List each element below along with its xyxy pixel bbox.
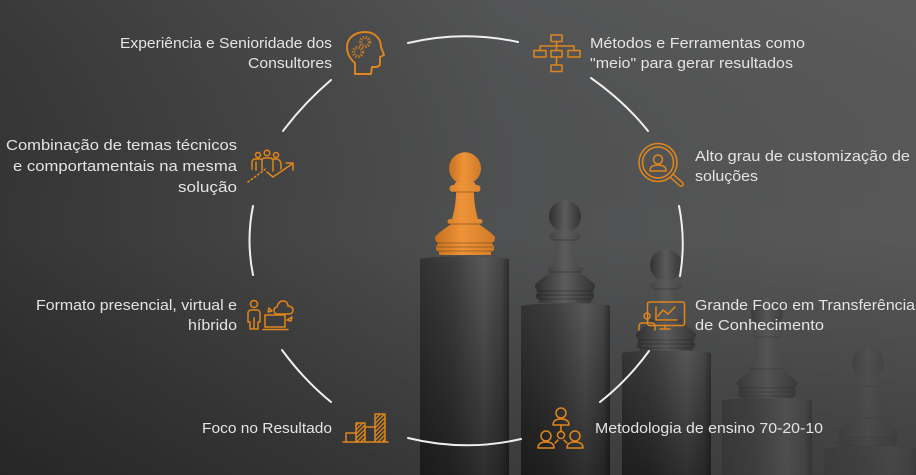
item: combinação — [6, 137, 293, 196]
item: experiência: Experiência e Senioridade dos — [120, 35, 332, 52]
item: customização: Alto grau de customização de — [695, 148, 910, 165]
icon: magnifier with person — [639, 144, 683, 186]
item: resultado — [202, 414, 388, 442]
item: experiência — [120, 32, 384, 74]
item: combinação: Combinação de temas técnicos — [6, 137, 237, 154]
icon: head with gears — [347, 32, 384, 74]
item: combinação: e comportamentais na mesma — [13, 158, 238, 175]
icon: flowchart — [534, 35, 580, 72]
chess podium — [420, 152, 916, 475]
icon: team with growth arrow — [248, 150, 293, 182]
circular ring arcs — [250, 36, 683, 445]
pawn and pedestal 2 — [521, 200, 610, 475]
item: formato — [36, 297, 293, 334]
icon: bar chart — [343, 414, 388, 442]
item: customização: soluções — [695, 168, 758, 185]
item: combinação: solução — [178, 179, 237, 196]
icon: connected people — [538, 408, 583, 448]
item: transferência — [639, 297, 916, 334]
item: transferência: de Conhecimento — [695, 317, 824, 334]
pawn and pedestal 3 — [622, 249, 711, 475]
orange pawn and pedestal 1 — [420, 152, 509, 475]
item: métodos: Métodos e Ferramentas como — [590, 35, 805, 52]
icon: person, laptop and cloud — [248, 300, 293, 330]
item: métodos: "meio" para gerar resultados — [590, 55, 793, 72]
item: metodologia: Metodologia de ensino 70-20-10 — [595, 420, 823, 437]
item: experiência: Consultores — [248, 55, 332, 72]
item: resultado: Foco no Resultado — [202, 420, 332, 437]
item: métodos — [534, 35, 805, 72]
item: transferência: Grande Foco em Transferência — [695, 297, 916, 314]
item: customização — [639, 144, 910, 186]
pawn and pedestal 5 — [824, 346, 916, 475]
pawn and pedestal 4 — [722, 297, 812, 475]
item: formato: híbrido — [188, 317, 237, 334]
icon: presenter with screen — [639, 302, 684, 330]
item: metodologia — [538, 408, 823, 448]
item: formato: Formato presencial, virtual e — [36, 297, 237, 314]
